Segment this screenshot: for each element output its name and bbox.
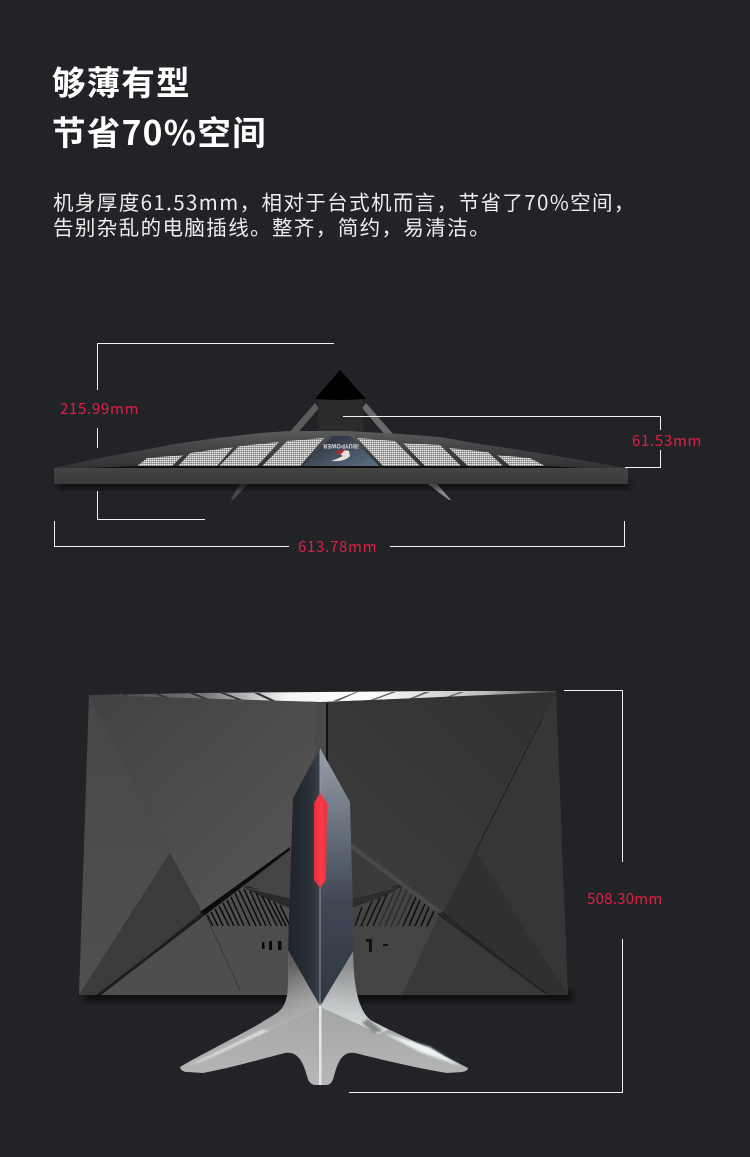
ports right	[366, 939, 388, 952]
stand legs below bar	[231, 484, 451, 500]
dimension: depth 215.99mm: 215.99mm	[60, 398, 139, 419]
description text: 告别杂乱的电脑插线。整齐，简约，易清洁。	[53, 211, 491, 241]
top edge vents	[89, 691, 556, 702]
stand arm	[288, 748, 354, 1006]
dimension: height 508.30mm	[349, 690, 663, 1092]
center logo panel: iBUYPOWER	[323, 442, 359, 451]
monitor top view	[54, 370, 630, 500]
right outer facet	[475, 692, 568, 995]
left face main	[89, 695, 320, 912]
base right leg highlight	[384, 1033, 460, 1066]
top shell	[54, 431, 627, 468]
stand struts	[288, 403, 393, 436]
inner recess	[88, 466, 585, 468]
stand apex	[315, 370, 366, 400]
dimension: height 508.30mm: 508.30mm	[587, 888, 663, 909]
dimension: depth 215.99mm	[60, 344, 334, 520]
dimension: thickness 61.53mm: 61.53mm	[632, 430, 702, 451]
description text	[53, 186, 636, 241]
monitor back view	[79, 691, 574, 1085]
stand neck	[318, 398, 363, 436]
stand base	[180, 945, 468, 1085]
base center line	[319, 1004, 322, 1085]
bar shadow	[58, 480, 630, 489]
center logo panel	[303, 436, 379, 466]
base left leg highlight	[188, 1030, 270, 1066]
red light strip	[314, 793, 327, 888]
description text: 机身厚度61.53mm，相对于台式机而言，节省了70%空间，	[53, 186, 636, 216]
cooling vents left	[207, 889, 290, 926]
center spine	[315, 702, 328, 763]
base right neck face	[322, 950, 388, 1034]
vents right	[357, 438, 545, 466]
dimension: thickness 61.53mm	[343, 416, 702, 468]
title: 节省70%空间	[52, 106, 267, 155]
back shadow	[84, 990, 574, 1002]
base shadow patch	[362, 1019, 383, 1033]
cooling vents right	[355, 887, 434, 926]
dimension: width 613.78mm	[54, 521, 624, 557]
left outer facet	[79, 695, 170, 995]
inner recess panels	[243, 843, 443, 913]
right face main	[327, 692, 556, 912]
ports left	[262, 941, 282, 950]
right lower dark wedge	[402, 913, 547, 995]
title	[52, 56, 267, 155]
left dark facet	[79, 853, 202, 995]
right dark facet	[443, 852, 568, 995]
vents left	[137, 438, 324, 466]
slit lines	[96, 717, 547, 995]
dimension: width 613.78mm: 613.78mm	[298, 536, 377, 557]
monitor bar	[54, 468, 628, 484]
right lower facet	[350, 887, 547, 995]
title: 够薄有型	[52, 56, 191, 105]
base left neck face	[262, 950, 320, 1031]
left lower facet	[96, 887, 290, 995]
